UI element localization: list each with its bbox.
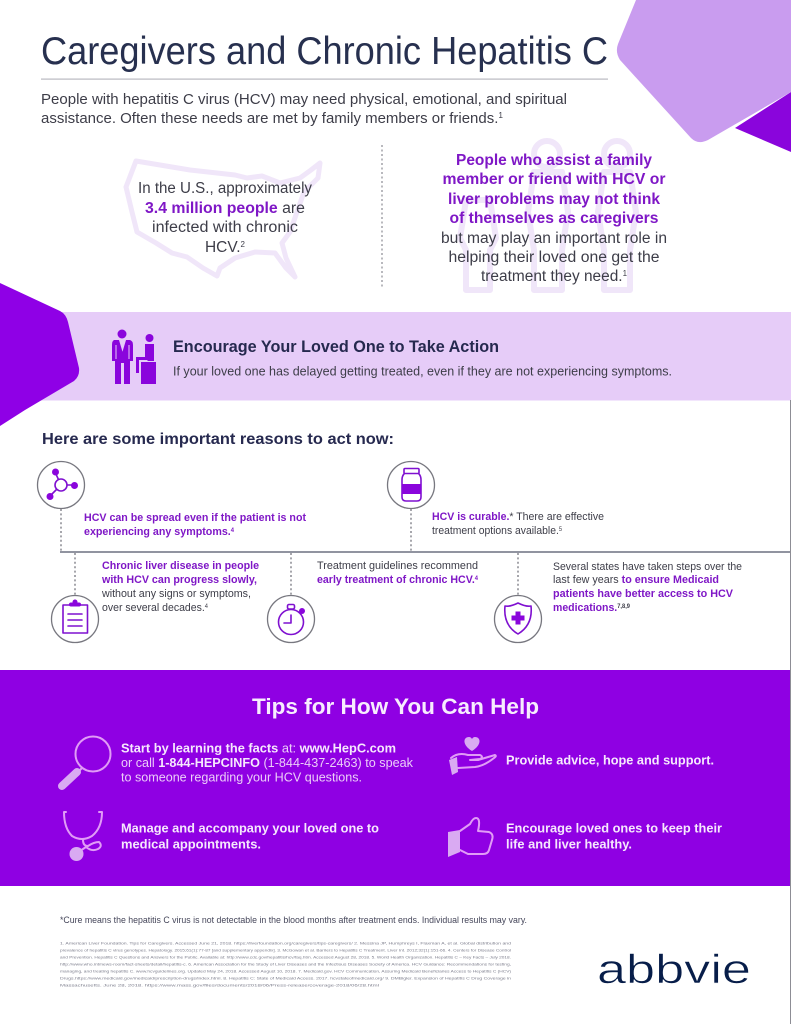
decorative hexagon: left bbox=[0, 283, 79, 426]
reason text: experiencing any symptoms. bbox=[84, 526, 235, 538]
reason: spread without symptoms bbox=[38, 462, 306, 551]
tip: advice: Provide advice, hope and support. bbox=[506, 754, 714, 768]
right edge line bbox=[790, 400, 791, 1024]
icon: clipboard bbox=[63, 600, 88, 633]
icon: faint family figures bbox=[460, 141, 636, 290]
title: Caregivers and Chronic Hepatitis C bbox=[41, 30, 608, 73]
icon: thumbs up bbox=[448, 818, 493, 857]
references: managing, and treating hepatitis C. www.hcvguidelines.org. Updated May 24, 2018. Accessed August 10, 2018. 7. Medicaid.gov. HCV Communication, Assuring Medicaid Beneficiaries Access to Hepatitis C (HCV) bbox=[60, 968, 512, 974]
reason text: 4 bbox=[205, 604, 209, 610]
caregivers statement: helping their loved one get the bbox=[448, 249, 660, 266]
stat text: 3.4 million: infected with chronic bbox=[152, 219, 298, 236]
icon: magnifying glass bbox=[62, 736, 110, 786]
timeline axis bbox=[60, 551, 790, 553]
reason: slow progression bbox=[52, 553, 259, 642]
stat text: 3.4 million: 2 bbox=[241, 240, 246, 249]
reason text: Chronic liver disease in people bbox=[102, 560, 259, 572]
reason text: 5 bbox=[559, 527, 563, 533]
stat text: 3.4 million: HCV. bbox=[205, 239, 241, 256]
column divider bbox=[381, 145, 383, 288]
decorative hexagon: top right dark bbox=[735, 92, 791, 152]
reason text: Treatment guidelines recommend bbox=[317, 560, 478, 572]
panel: encourage banner bbox=[0, 283, 791, 426]
reason text bbox=[432, 511, 604, 537]
reason text: 7,8,9 bbox=[617, 604, 631, 610]
stat text: 3.4 million bbox=[138, 180, 312, 256]
references: Massachusetts. June 28, 2018. https://www.mass.gov/files/documents/2018/06/Press-release/coverage-2018/06/28.html bbox=[60, 982, 379, 988]
caregivers statement: member or friend with HCV or bbox=[442, 171, 666, 188]
logo: abbvie: abbvie bbox=[597, 946, 751, 992]
intro text bbox=[41, 92, 567, 127]
reason text bbox=[101, 560, 259, 614]
intro text: People with hepatitis C virus (HCV) may need physical, emotional, and spiritual bbox=[41, 92, 567, 108]
references: and Prevention. Hepatitis C Questions and Answers for the Public. Available at: http://www.cdc.gov/hepatitis/hcv/faq.htm. Accessed August 28, 2018. 5. World Health Organization. Hepatitis C – Key Facts – July 2018. bbox=[60, 954, 511, 960]
banner subtext: If your loved one has delayed getting treated, even if they are not experiencing symptoms. bbox=[173, 364, 672, 378]
icon: stethoscope bbox=[64, 812, 102, 861]
tip: keep healthy bbox=[506, 822, 722, 852]
tip: appointments: Manage and accompany your loved one to bbox=[121, 822, 379, 836]
references: prevalence of hepatitis C virus genotypes. Hepatology. 2015;61(1):77-87 [and supplementary appendix]. 3. McGowan et al. Barriers to Hepatitis C Treatment. Liver Int. 2012;32(1):151-66. 4. Centers for Disease Control bbox=[60, 948, 511, 952]
reason text bbox=[553, 561, 742, 614]
reason text: without any signs or symptoms, bbox=[101, 588, 251, 600]
reason text: HCV is curable.* There are effective bbox=[432, 511, 604, 523]
title rule bbox=[41, 78, 608, 80]
icon: two people bbox=[112, 330, 156, 384]
icon: shield with cross bbox=[505, 603, 531, 634]
reason: medicaid access bbox=[494, 553, 742, 642]
tip: appointments: medical appointments. bbox=[121, 838, 261, 852]
reason text: patients have better access to HCV bbox=[553, 588, 734, 600]
caregivers statement: People who assist a family bbox=[456, 152, 652, 169]
tips heading: Tips for How You Can Help bbox=[252, 694, 539, 719]
references: 1. American Liver Foundation. Tips for Caregivers. Accessed June 21, 2018. https://liverfoundation.org/caregivers/tips-caregivers/ 2. Messina JP, Humphreys I, Flaxman A, et al. Global distribution and bbox=[60, 940, 511, 946]
reasons heading: Here are some important reasons to act now: bbox=[42, 431, 394, 448]
icon: pill bottle bbox=[402, 468, 421, 501]
tip: learn the facts bbox=[121, 742, 414, 784]
tip: keep healthy: Encourage loved ones to keep their bbox=[506, 822, 722, 836]
stat text: 3.4 million: In the U.S., approximately bbox=[138, 180, 312, 197]
tip: learn the facts: Start by learning the facts at: www.HepC.com bbox=[121, 742, 396, 756]
intro text: 1 bbox=[498, 111, 504, 120]
reason text: early treatment of chronic HCV. bbox=[317, 574, 480, 586]
decorative hexagon: top right light bbox=[617, 0, 791, 142]
panel: tips bbox=[0, 670, 791, 886]
reason text bbox=[84, 512, 306, 538]
tips background bbox=[0, 670, 791, 886]
reason text: HCV can be spread even if the patient is not bbox=[84, 512, 306, 524]
reason text: medications. bbox=[553, 602, 620, 614]
reason text: Several states have taken steps over the bbox=[553, 561, 742, 573]
references: http://www.who.int/news-room/fact-sheets/detail/hepatitis-c. 6. American Association for the Study of Liver Diseases and the Infectious Diseases Society of America. HCV Guidance: Recommendations for testing, bbox=[60, 962, 511, 966]
caregivers statement: 1 bbox=[623, 269, 628, 278]
caregivers statement: liver problems may not think bbox=[448, 191, 660, 208]
reason text: over several decades. bbox=[102, 602, 210, 614]
tip: learn the facts: or call 1-844-HEPCINFO (1-844-437-2463) to speak bbox=[121, 756, 414, 770]
icon: stopwatch bbox=[278, 604, 305, 634]
reason text bbox=[317, 560, 479, 586]
icon: faint U.S. map bbox=[126, 161, 320, 277]
reason text: 4 bbox=[231, 528, 235, 534]
reason text: treatment options available. bbox=[432, 525, 567, 537]
stat text: 3.4 million: 3.4 million people are bbox=[145, 200, 305, 217]
reason text: 4 bbox=[475, 576, 479, 582]
caregivers statement: treatment they need. bbox=[481, 268, 623, 285]
caregivers statement: but may play an important role in bbox=[441, 230, 667, 247]
reason text: with HCV can progress slowly, bbox=[101, 574, 257, 586]
references bbox=[60, 940, 512, 988]
tip: appointments bbox=[121, 822, 379, 852]
reason text: last few years to ensure Medicaid bbox=[553, 574, 719, 586]
icon: heart in hand bbox=[449, 737, 496, 775]
intro text: assistance. Often these needs are met by family members or friends. bbox=[41, 111, 483, 127]
banner heading: Encourage Your Loved One to Take Action bbox=[173, 338, 499, 356]
icon: molecule bbox=[46, 468, 78, 500]
caregivers statement bbox=[441, 152, 667, 285]
reason: treatment guidelines bbox=[268, 553, 479, 642]
caregivers statement: of themselves as caregivers bbox=[450, 210, 658, 227]
banner background bbox=[0, 312, 791, 400]
reason: curable bbox=[388, 462, 604, 551]
references: Drugs.https://www.medicaid.gov/medicaid/prescription-drugs/index.html. 8. Hepatitis C: State of Medicaid Access. 2017. hcvstateofmedicaid.org/ 9. DMBigler. Expansion of Hepatitis C Drug Coverage in bbox=[60, 976, 511, 980]
footnote: cure definition: *Cure means the hepatitis C virus is not detectable in the blood months after treatment ends. Individual results may vary. bbox=[60, 915, 527, 925]
tip: learn the facts: to someone regarding your HCV questions. bbox=[121, 770, 362, 784]
tip: keep healthy: life and liver healthy. bbox=[506, 838, 632, 852]
